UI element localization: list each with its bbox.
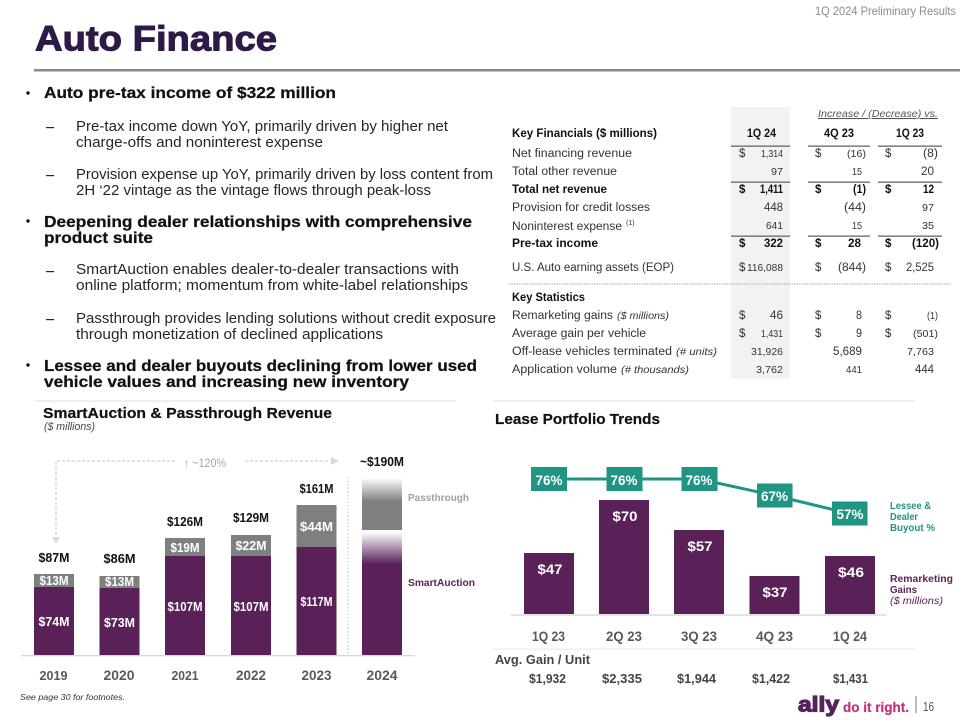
row: average gain per vehicle: 9 (856, 328, 862, 340)
line chart: lessee and dealer buyout percent: 67% (761, 489, 788, 504)
line chart: lessee and dealer buyout percent (531, 467, 868, 526)
row: net financing revenue: (16) (847, 148, 866, 160)
average gain values: $1,431 (833, 672, 868, 686)
bar: 2019: $87M (38, 551, 70, 565)
row: total net revenue: $ (739, 184, 746, 196)
legend: lessee and dealer buyout: Lessee & (890, 500, 931, 512)
sub-bullet: pre-tax income detail: charge-offs and noninterest expense (76, 135, 323, 151)
bar chart: remarketing gains: $70 (612, 509, 638, 524)
table header (512, 108, 938, 140)
row: pre-tax income: 28 (848, 238, 862, 250)
table section divider (509, 283, 951, 285)
quarter labels: 4Q 23 (756, 629, 793, 644)
legend: lessee and dealer buyout: Buyout % (890, 522, 936, 534)
legend: Passthrough: Passthrough (408, 492, 469, 504)
bar chart: remarketing gains: $57 (688, 539, 712, 554)
row: net financing revenue: $ (815, 148, 822, 160)
row: total net revenue: $ (815, 184, 822, 196)
page number: 16 (923, 700, 934, 714)
year labels: 2021 (172, 668, 198, 683)
year labels: 2022 (236, 668, 266, 683)
row: remarketing gains: 46 (770, 310, 783, 322)
row: remarketing gains: 8 (856, 310, 862, 322)
heading: key statistics: Key Statistics (512, 292, 585, 304)
row: total other revenue: 20 (921, 166, 934, 178)
row: application volume: 444 (915, 364, 935, 376)
stacked bars (34, 455, 404, 655)
row: application volume: 441 (846, 364, 862, 376)
row: off-lease vehicles terminated: 5,689 (833, 346, 862, 358)
row: U.S. auto earning assets: U.S. Auto earning assets (EOP) (512, 262, 674, 274)
row: pre-tax income: $ (739, 238, 746, 250)
row: net financing revenue (512, 148, 938, 160)
bar: 2019: $74M (38, 615, 70, 629)
sub-bullet: pre-tax income detail (46, 119, 448, 151)
legend: SmartAuction: SmartAuction (408, 577, 475, 589)
logo divider (916, 696, 917, 713)
row: application volume: Application volume (512, 364, 617, 376)
bullet: dealer relationships (26, 214, 472, 247)
row: pre-tax income: $ (885, 238, 892, 250)
row: pre-tax income: $ (815, 238, 822, 250)
heading: average gain per unit: Avg. Gain / Unit (495, 652, 591, 667)
average gain values: $1,932 (529, 672, 566, 686)
row: remarketing gains: ($ millions) (617, 311, 669, 322)
bar: 2022: $107M (234, 600, 268, 614)
sub-bullet: Passthrough: Passthrough provides lending solutions without credit exposure (76, 311, 496, 327)
row: U.S. auto earning assets (512, 262, 934, 274)
title: Auto Finance (35, 20, 277, 58)
row: average gain per vehicle: $ (885, 328, 892, 340)
row: U.S. auto earning assets: $ (815, 262, 822, 274)
row: total net revenue (512, 184, 934, 196)
legend: remarketing gains: Remarketing (890, 573, 953, 585)
row: noninterest expense: 641 (766, 220, 783, 232)
average gain values: $2,335 (602, 671, 642, 686)
row: total net revenue: Total net revenue (512, 184, 607, 196)
row: total other revenue (512, 166, 934, 178)
bar: 2024 estimate: ~$190M (360, 455, 404, 469)
row: U.S. auto earning assets: (844) (838, 262, 866, 274)
row: pre-tax income: Pre-tax income (512, 238, 598, 250)
row: noninterest expense: Noninterest expense (512, 221, 622, 233)
logo: ally do it right (798, 692, 909, 716)
row: remarketing gains: $ (885, 310, 892, 322)
row: total other revenue: Total other revenue (512, 166, 617, 178)
growth arrow: about 120 percent (52, 456, 339, 544)
legend: remarketing gains (890, 573, 953, 607)
table header: 1Q 23 (896, 128, 924, 140)
quarter labels: 3Q 23 (681, 629, 717, 644)
table header: Increase / (Decrease) vs. (818, 108, 938, 120)
row: application volume (512, 364, 935, 376)
axis (21, 655, 415, 656)
row: U.S. auto earning assets: 116,088 (747, 262, 783, 274)
bullet: buyouts: Lessee and dealer buyouts declining from lower used (44, 358, 477, 375)
bar chart: remarketing gains: $46 (838, 565, 865, 580)
table rules (731, 146, 942, 237)
row: net financing revenue: Net financing revenue (512, 148, 632, 160)
row: noninterest expense: 15 (852, 220, 862, 232)
year labels: 2023 (302, 668, 332, 683)
legend: lessee and dealer buyout (890, 500, 936, 534)
row: net financing revenue: (8) (923, 148, 938, 160)
row: total other revenue: 15 (852, 166, 862, 178)
line chart: lessee and dealer buyout percent: 57% (836, 507, 864, 522)
row: application volume: 3,762 (756, 364, 783, 376)
sub-bullet: SmartAuction (46, 262, 468, 294)
row: average gain per vehicle: (501) (913, 328, 938, 340)
bar: 2024 estimate (360, 455, 404, 655)
bullet: buyouts: vehicle values and increasing new inventory (44, 374, 409, 391)
row: off-lease vehicles terminated: 7,763 (907, 346, 934, 358)
average gain values: $1,944 (677, 671, 717, 686)
title rule (34, 69, 960, 72)
legend: lessee and dealer buyout: Dealer (890, 511, 918, 523)
row: off-lease vehicles terminated (512, 346, 934, 358)
row: average gain per vehicle (512, 328, 938, 340)
row: net financing revenue: $ (739, 148, 746, 160)
row: average gain per vehicle: Average gain per vehicle (512, 328, 646, 340)
sub-bullet: provision detail: Provision expense up YoY, primarily driven by loss content from (76, 167, 493, 183)
row: off-lease vehicles terminated: Off-lease vehicles terminated (512, 346, 672, 358)
logo: ally do it right: ally (798, 692, 839, 716)
row: remarketing gains: Remarketing gains (512, 310, 613, 322)
row: noninterest expense: (1) (626, 220, 635, 227)
legend: remarketing gains: ($ millions) (890, 595, 943, 607)
quarter labels: 2Q 23 (606, 629, 642, 644)
text block: key messages (26, 85, 496, 391)
row: total net revenue: 1,411 (760, 184, 783, 196)
bar: 2020: $73M (104, 616, 135, 630)
row: remarketing gains (512, 310, 938, 322)
sub-bullet: Passthrough: through monetization of declined applications (76, 327, 383, 343)
year labels (40, 668, 398, 683)
bar: 2021: $126M (167, 515, 203, 529)
row: application volume: (# thousands) (621, 365, 689, 376)
year labels: 2024 (366, 668, 398, 683)
panel: SmartAuction and Passthrough revenue (21, 400, 475, 683)
sub-bullet: pre-tax income detail: Pre-tax income down YoY, primarily driven by higher net (76, 119, 448, 135)
row: U.S. auto earning assets: 2,525 (906, 262, 934, 274)
bullet: dealer relationships: Deepening dealer relationships with comprehensive (44, 214, 472, 231)
table: key financials and statistics (509, 107, 951, 379)
bar: 2023: $117M (300, 595, 332, 609)
bullet: dealer relationships: product suite (44, 230, 153, 247)
sub-bullet: provision detail: 2H ‘22 vintage as the vintage flows through peak-loss (76, 183, 431, 199)
bar: 2022 (231, 511, 271, 655)
bar: 2021: $107M (168, 600, 202, 614)
bar chart: remarketing gains: $47 (538, 562, 562, 577)
row: average gain per vehicle: 1,431 (761, 328, 783, 340)
bar chart: remarketing gains (511, 500, 887, 616)
row: noninterest expense (512, 220, 934, 233)
row: remarketing gains: $ (815, 310, 822, 322)
table header: 1Q 24 (747, 128, 777, 140)
table column highlight (731, 107, 790, 379)
bar: 2021: $19M (170, 541, 200, 555)
bar: 2021 (165, 515, 205, 655)
year labels: 2020 (104, 668, 134, 683)
panel: lease portfolio trends (492, 400, 953, 686)
row: off-lease vehicles terminated: (# units) (676, 347, 717, 358)
bar: 2022: $22M (236, 539, 266, 553)
row: provision for credit losses (512, 202, 934, 214)
quarter labels: 1Q 24 (833, 629, 867, 644)
row: U.S. auto earning assets: $ (885, 262, 892, 274)
row: pre-tax income: (120) (912, 238, 939, 250)
line chart: lessee and dealer buyout percent: 76% (610, 473, 638, 488)
bar: 2022: $129M (233, 511, 269, 525)
row: U.S. auto earning assets: $ (739, 262, 746, 274)
sub-bullet: SmartAuction: SmartAuction enables dealer-to-dealer transactions with (76, 262, 459, 278)
row: provision for credit losses: (44) (844, 202, 866, 214)
row: total other revenue: 97 (771, 166, 783, 178)
row: total net revenue: (1) (853, 184, 866, 196)
bullet: buyouts (26, 358, 477, 391)
growth arrow: about 120 percent: ↑ ~120% (184, 456, 226, 470)
heading: lease portfolio trends: Lease Portfolio Trends (495, 411, 660, 428)
bar: 2023 (296, 482, 336, 655)
line chart: lessee and dealer buyout percent: 76% (536, 473, 562, 488)
heading: SmartAuction and Passthrough revenue: SmartAuction & Passthrough Revenue (43, 405, 332, 422)
quarter labels: 1Q 23 (532, 629, 565, 644)
bar: 2020 (100, 552, 140, 655)
average gain values (529, 671, 868, 686)
row: net financing revenue: $ (885, 148, 892, 160)
bar: 2020: $86M (104, 552, 136, 566)
table header: 4Q 23 (824, 128, 854, 140)
sub-bullet: provision detail (46, 167, 493, 199)
row: average gain per vehicle: $ (815, 328, 822, 340)
row: provision for credit losses: Provision for credit losses (512, 202, 650, 214)
bar chart: remarketing gains: $37 (762, 585, 788, 600)
footnote: See page 30 for footnotes. (20, 692, 125, 702)
row: provision for credit losses: 97 (922, 202, 934, 214)
row: noninterest expense: 35 (922, 220, 934, 232)
row: net financing revenue: 1,314 (761, 148, 783, 160)
row: provision for credit losses: 448 (764, 202, 783, 214)
row: off-lease vehicles terminated: 31,926 (751, 346, 783, 358)
row: total net revenue: 12 (923, 184, 934, 196)
row: pre-tax income (512, 238, 939, 250)
sub-bullet: SmartAuction: online platform; momentum from white-label relationships (76, 278, 468, 294)
bar: 2019: $13M (40, 574, 68, 588)
quarter labels (532, 629, 867, 644)
logo: ally do it right: do it right. (843, 700, 909, 715)
bar: 2023: $44M (300, 520, 333, 534)
subheading: units: ($ millions) (44, 421, 95, 433)
bar: 2023: $161M (300, 482, 334, 496)
bar: 2020: $13M (105, 575, 134, 589)
sub-bullet: Passthrough (46, 311, 496, 343)
legend: remarketing gains: Gains (890, 584, 917, 596)
table header: Key Financials ($ millions) (512, 128, 657, 140)
year labels: 2019 (40, 668, 68, 683)
row: pre-tax income: 322 (764, 238, 783, 250)
row: average gain per vehicle: $ (739, 328, 746, 340)
row: remarketing gains: (1) (927, 310, 938, 322)
row: remarketing gains: $ (739, 310, 746, 322)
divider: forecast (347, 477, 349, 655)
average gain values: $1,422 (752, 671, 790, 686)
row: total net revenue: $ (885, 184, 892, 196)
line chart: lessee and dealer buyout percent: 76% (686, 473, 712, 488)
bar: 2019 (34, 551, 74, 655)
bullet: pre-tax income: Auto pre-tax income of $322 million (44, 85, 336, 102)
